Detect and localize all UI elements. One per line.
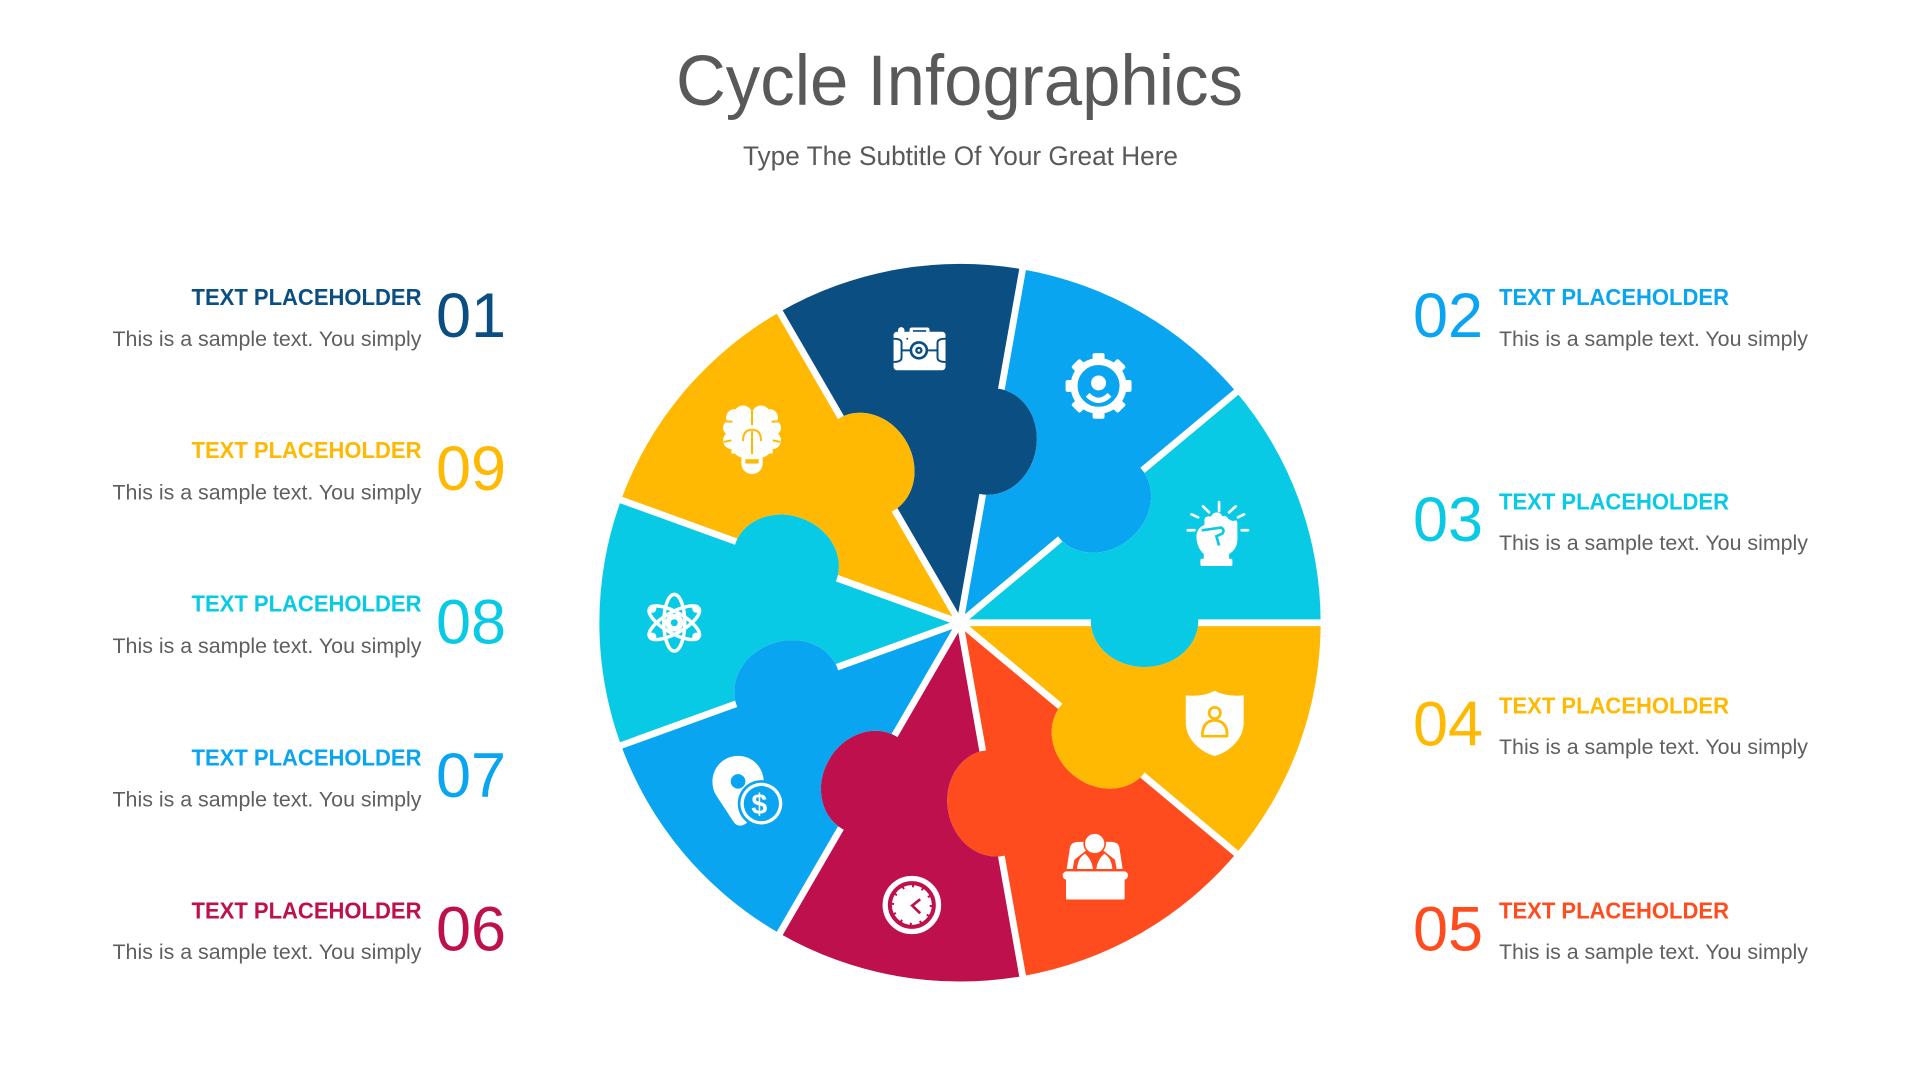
item 05: TEXT PLACEHOLDER — [1499, 898, 1729, 924]
item 02 — [1413, 281, 1808, 351]
item 01: This is a sample text. You simply — [112, 327, 422, 351]
item 09: 09 — [436, 434, 506, 504]
piece 09: yellow with brain bulb — [579, 290, 999, 738]
item 04: 04 — [1413, 690, 1483, 760]
piece 04: yellow with shield — [931, 446, 1385, 887]
item 04 — [1413, 690, 1808, 760]
icon: shield with person — [1186, 691, 1244, 756]
piece 07: blue with dollar pin — [606, 581, 1039, 962]
item 06: This is a sample text. You simply — [112, 940, 422, 964]
item 03: 03 — [1413, 485, 1483, 555]
subtitle: Type The Subtitle Of Your Great Here — [743, 141, 1178, 171]
item 06: 06 — [436, 894, 506, 964]
piece 01: navy with camera — [732, 229, 1067, 630]
icon: brain light bulb — [723, 406, 781, 474]
piece 05: orange-red with podium — [916, 583, 1251, 984]
item 09 — [112, 434, 506, 504]
item 05 — [1413, 894, 1808, 964]
item 09: This is a sample text. You simply — [112, 480, 422, 504]
icon: gear with person — [1066, 353, 1132, 419]
item 01: 01 — [436, 281, 506, 351]
item 01 — [112, 281, 506, 351]
item 03: This is a sample text. You simply — [1499, 531, 1808, 555]
item 03 — [1413, 485, 1808, 555]
item 04: TEXT PLACEHOLDER — [1499, 692, 1729, 718]
icon: speaker podium — [1063, 832, 1128, 900]
item 01: TEXT PLACEHOLDER — [192, 284, 422, 310]
item 04: This is a sample text. You simply — [1499, 735, 1808, 759]
piece 08: cyan with atom — [542, 458, 975, 839]
item 05: 05 — [1413, 894, 1483, 964]
icon: raised fist — [1188, 502, 1248, 566]
item 03: TEXT PLACEHOLDER — [1499, 488, 1729, 514]
icon: map pin with dollar coin: $ — [751, 789, 767, 821]
item 07: 07 — [436, 741, 506, 811]
item 09: TEXT PLACEHOLDER — [192, 437, 422, 463]
item 06 — [112, 894, 506, 964]
piece 02: blue with gear — [811, 215, 1265, 657]
icon: camera — [894, 327, 946, 370]
icon: clock — [885, 878, 938, 931]
item 08: TEXT PLACEHOLDER — [192, 590, 422, 616]
item 07 — [112, 741, 506, 812]
item 07: This is a sample text. You simply — [112, 788, 422, 812]
piece 03: cyan with raised fist — [960, 392, 1321, 667]
icon: map pin with dollar coin — [712, 756, 785, 827]
item 08: This is a sample text. You simply — [112, 634, 422, 658]
item 02: This is a sample text. You simply — [1499, 327, 1808, 351]
item 02: 02 — [1413, 281, 1483, 351]
title: Cycle Infographics — [676, 42, 1243, 121]
icon: atom — [644, 594, 704, 651]
item 06: TEXT PLACEHOLDER — [192, 898, 422, 924]
cycle wheel: nine interlocking puzzle pieces — [542, 215, 1385, 1049]
piece 06: crimson with clock — [741, 601, 1161, 1049]
item 08 — [112, 588, 506, 658]
item 05: This is a sample text. You simply — [1499, 940, 1808, 964]
item 08: 08 — [436, 588, 506, 658]
item 02: TEXT PLACEHOLDER — [1499, 284, 1729, 310]
item 07: TEXT PLACEHOLDER — [192, 744, 422, 770]
